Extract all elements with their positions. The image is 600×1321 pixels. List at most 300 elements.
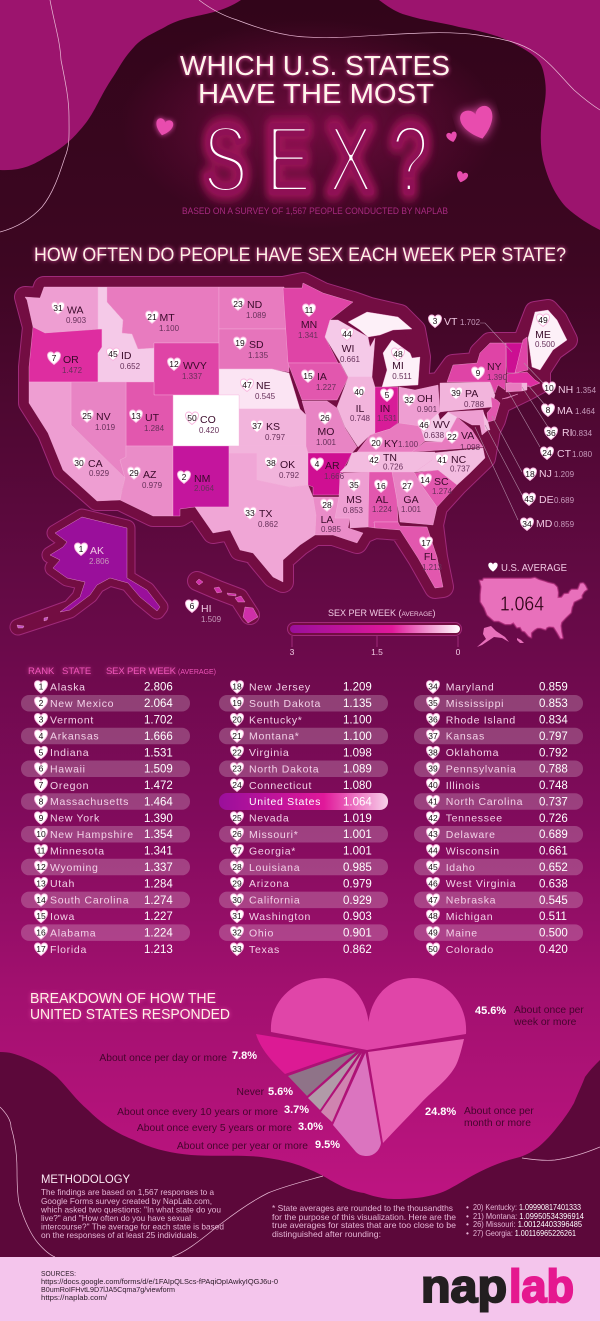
- label: HI: 1.509: [201, 615, 222, 624]
- US silhouette glow: [480, 578, 587, 638]
- label: IN: [377, 389, 398, 423]
- label: 3.7%: [117, 1104, 309, 1118]
- label: MO: 1.001: [316, 438, 337, 447]
- state: Arizona: [120, 446, 173, 516]
- legend title: SEX PER WEEK (AVERAGE): [328, 608, 435, 618]
- label: GA: 27: [402, 481, 412, 491]
- label: CA: [72, 457, 110, 478]
- row: Florida: 17: [36, 944, 46, 954]
- label: 7.8%: [99, 1050, 257, 1064]
- footnote: distinguished after rounding:: [272, 1229, 381, 1239]
- state: Hawaii Oahu: [214, 587, 222, 593]
- title: [180, 50, 450, 109]
- label: LA: LA: [321, 514, 333, 526]
- row: Nebraska: [414, 892, 583, 908]
- label: IN: IN: [380, 403, 390, 415]
- logo: naplab: [421, 1260, 574, 1312]
- row: Maryland: 34: [428, 682, 438, 692]
- row: Nevada: [230, 812, 372, 825]
- label: VA: VA: [461, 430, 474, 442]
- slice: every 5 years 3.0%: [321, 1053, 362, 1122]
- label: WA: WA: [67, 304, 84, 316]
- table column 2: [219, 681, 388, 956]
- label: MN: MN: [301, 319, 317, 331]
- row: Texas: Texas: [249, 944, 280, 956]
- state: Long Island: [502, 394, 518, 399]
- label: OK: 38: [266, 458, 276, 468]
- label: KY: [369, 437, 419, 450]
- label: RI: RI: [562, 427, 572, 439]
- row: Ohio: Ohio: [249, 927, 274, 939]
- row: Alabama: 16: [36, 928, 46, 938]
- row: Wyoming: Wyoming: [50, 862, 99, 874]
- state: Maryland: [448, 410, 488, 435]
- icon: heart large right: [458, 104, 498, 143]
- state: Ohio: [399, 385, 440, 426]
- row: South Dakota: 19: [232, 698, 242, 708]
- row: Massachusetts: 1.464: [144, 796, 173, 808]
- row: New Jersey: [230, 681, 372, 694]
- state: Minnesota: [283, 283, 353, 363]
- title word: SEX? neon: SEX?: [203, 105, 429, 213]
- row: California: [219, 892, 388, 908]
- legend labels: 3: [290, 647, 295, 657]
- footnote list: 27) Georgia: 1.00116965226261: [473, 1228, 576, 1238]
- row: Massachusetts: Massachusetts: [50, 796, 129, 808]
- row: Connecticut: [230, 779, 372, 792]
- label: FL: [419, 537, 443, 572]
- label: OH: 32: [404, 395, 414, 405]
- row: Maryland: Maryland: [446, 682, 494, 694]
- row: Nebraska: Nebraska: [446, 895, 496, 907]
- row: Florida: [34, 943, 173, 956]
- decorative line: bottom right: [522, 1147, 600, 1160]
- methodology text: intercourse?" The average for each state is based: [41, 1222, 224, 1232]
- title: HAVE THE MOST: [198, 78, 434, 109]
- state: Rhode Island: [522, 383, 527, 391]
- row: New York: 1.390: [144, 813, 173, 825]
- row: Wisconsin: Wisconsin: [446, 845, 500, 857]
- state: Montana: [107, 287, 219, 349]
- row: New Hampshire: New Hampshire: [50, 829, 134, 841]
- label: 24.8%: About once per: [464, 1106, 534, 1117]
- label: CO: 50: [187, 413, 197, 423]
- label: 9.5%: About once per year or more: [177, 1141, 308, 1152]
- row: Virginia: 1.098: [343, 747, 372, 759]
- label: ND: 1.089: [246, 311, 267, 320]
- row: Nebraska: 47: [428, 895, 438, 905]
- label: MT: [145, 311, 180, 333]
- label: CA: 30: [74, 458, 84, 468]
- label: IN: 5: [385, 390, 390, 400]
- label: NE: [240, 379, 276, 401]
- row: Vermont: Vermont: [50, 714, 94, 726]
- state: Michigan lower: [382, 340, 420, 387]
- row: New Jersey: 1.209: [343, 682, 372, 694]
- row: South Dakota: South Dakota: [249, 698, 321, 710]
- map: band around Hawaii: [197, 581, 250, 615]
- legend labels: 1.5: [371, 647, 383, 657]
- label: WI: [340, 328, 361, 364]
- state: Wyoming: [154, 343, 219, 395]
- label: AZ: [127, 467, 163, 490]
- footnote: [272, 1203, 456, 1239]
- logo: naplab: nap: [421, 1260, 507, 1312]
- label: ND: [231, 298, 267, 320]
- heading: U.S. average: U.S. AVERAGE: [501, 562, 567, 574]
- row: Missouri: 1.001: [343, 829, 372, 841]
- state: South Dakota: [219, 329, 289, 372]
- row: Mississippi: Mississippi: [446, 698, 504, 710]
- row: Virginia: Virginia: [249, 747, 289, 759]
- label: 9.5%: 9.5%: [315, 1139, 340, 1151]
- state: Texas: [195, 453, 316, 582]
- row: Idaho: 45: [428, 862, 438, 872]
- row: Alaska: [34, 681, 173, 694]
- row: North Dakota: [219, 760, 388, 777]
- icon: heart left: [154, 117, 174, 137]
- state: South Carolina: [414, 470, 457, 507]
- label: CA: CA: [88, 458, 103, 470]
- state: New Mexico: [173, 446, 229, 516]
- row: Wisconsin: 0.661: [539, 846, 568, 858]
- slice: never 5.6%: [288, 1052, 356, 1096]
- breakdown heading: BREAKDOWN OF HOW THE: [30, 991, 216, 1007]
- footer panel: [0, 1257, 600, 1321]
- label: 3.0%: About once every 5 years or more: [137, 1123, 292, 1134]
- label: NV: [80, 410, 116, 432]
- label: 9.5%: [177, 1139, 340, 1152]
- label: AL: AL: [376, 494, 389, 506]
- row: Maine: Maine: [446, 927, 478, 939]
- table header: SEX PER WEEK: [106, 666, 177, 677]
- label: OH: OH: [417, 393, 433, 405]
- row: Kansas: [414, 728, 583, 744]
- row: Florida: Florida: [50, 944, 87, 956]
- label: IA: [301, 370, 337, 392]
- state: Hawaii Maui: [235, 596, 245, 602]
- label: WV: 46: [419, 420, 429, 430]
- label: WV: WV: [433, 419, 450, 431]
- label: KY: 20: [371, 438, 381, 448]
- label: WI: 44: [342, 329, 352, 339]
- label: CO: 0.420: [199, 426, 220, 435]
- state: New York: [447, 343, 506, 393]
- label: SC: 1.274: [432, 487, 453, 496]
- row: Louisiana: 28: [232, 862, 242, 872]
- label: WI: WI: [342, 343, 354, 355]
- row: United States: United States: [249, 796, 321, 808]
- row: Indiana: 1.531: [144, 747, 173, 759]
- row: Montana: 1.100: [343, 731, 372, 743]
- US silhouette: [480, 578, 587, 638]
- row: Illinois: 40: [428, 780, 438, 790]
- label: MO: [316, 412, 337, 447]
- row: Delaware: Delaware: [446, 829, 496, 841]
- label: AK: [74, 543, 110, 566]
- legend labels: [290, 647, 461, 657]
- row: Arkansas: Arkansas: [50, 731, 99, 743]
- row: Mississippi: 0.853: [539, 698, 568, 710]
- row: North Carolina: [414, 793, 583, 810]
- state: Alabama: [368, 472, 398, 528]
- row: Oregon: 7: [39, 780, 44, 790]
- label: CO: [185, 412, 220, 435]
- row: New Hampshire: 1.354: [144, 829, 173, 841]
- methodology text: live?" and "How often do you have sexual: [41, 1213, 191, 1223]
- label: 5.6%: Never: [237, 1087, 265, 1098]
- state: Hawaii Molokai: [227, 593, 236, 596]
- row: New Jersey: 18: [232, 682, 242, 692]
- row: Tennessee: 42: [428, 813, 438, 823]
- label: PA: PA: [465, 388, 478, 400]
- label: ID: ID: [121, 350, 132, 362]
- row: Louisiana: Louisiana: [249, 862, 300, 874]
- decorative line: bottom middle: [172, 1176, 323, 1257]
- row: Maine: 49: [428, 928, 438, 938]
- blob: bottom dark: [0, 1052, 600, 1260]
- row: South Dakota: [219, 695, 388, 712]
- label: VA: 22: [447, 432, 457, 442]
- label: MI: 48: [393, 349, 403, 359]
- state: Missouri: [302, 401, 357, 453]
- row: Ohio: 0.901: [343, 928, 372, 940]
- sources: https://docs.google.com/forms/d/e/1FAIpQLScs-fPAqiOpIAwkyIQGJ6u-0: [41, 1277, 278, 1286]
- row: Minnesota: Minnesota: [50, 845, 105, 857]
- row: Arkansas: 1.666: [144, 731, 173, 743]
- legend bar: [288, 622, 462, 636]
- label: NY: 9: [476, 368, 481, 378]
- icon: heart small right: [446, 131, 458, 143]
- label: TX: 33: [245, 508, 255, 518]
- footnote list: •: [466, 1219, 469, 1229]
- state: Virginia: [412, 417, 483, 452]
- label: MA: MA: [557, 405, 573, 417]
- row: Florida: 1.213: [144, 944, 173, 956]
- label: MA: 8: [546, 405, 551, 415]
- row: Rhode Island: 36: [428, 714, 438, 724]
- map: band around Alaska: [18, 517, 160, 627]
- row: Louisiana: 0.985: [343, 862, 372, 874]
- label: 3.0%: 3.0%: [298, 1121, 323, 1133]
- label: MO: 26: [320, 413, 330, 423]
- row: Wisconsin: 44: [428, 846, 438, 856]
- row: Connecticut: 24: [232, 780, 242, 790]
- row: West Virginia: 46: [428, 878, 438, 888]
- row: Vermont: 3: [39, 714, 44, 724]
- row: Michigan: 0.511: [539, 911, 567, 923]
- state: Vermont: [506, 343, 523, 373]
- map labels: [47, 298, 597, 624]
- row: North Carolina: 0.737: [539, 796, 568, 808]
- row: Oregon: Oregon: [50, 780, 89, 792]
- row: Tennessee: Tennessee: [446, 813, 503, 825]
- row: Rhode Island: [426, 714, 568, 726]
- Hawaii mini: [517, 638, 524, 643]
- breakdown heading: BREAKDOWN OF HOW THE: [30, 991, 216, 1007]
- state: Colorado: [173, 395, 239, 446]
- row: North Dakota: North Dakota: [249, 764, 319, 776]
- row: Delaware: 43: [428, 829, 438, 839]
- row: North Dakota: 23: [232, 764, 242, 774]
- label: LA: 0.985: [321, 525, 342, 534]
- label: DE: DE: [539, 494, 554, 506]
- label: WV: [417, 419, 450, 440]
- label: CT: 1.080: [572, 450, 593, 459]
- label: AK: 1: [79, 544, 84, 554]
- state: New Hampshire: [515, 337, 528, 373]
- label: IL: [350, 386, 371, 423]
- blob: top left: [0, 0, 241, 170]
- sources: B0umRoIFHvtL9D7lJA5Cqma7g/viewform: [41, 1285, 175, 1294]
- label: 45.6%: week or more: [513, 1017, 577, 1028]
- row: Oregon: [34, 779, 173, 792]
- breakdown heading: [30, 991, 230, 1023]
- label: KY: KY: [384, 438, 398, 450]
- row: Alaska: 2.806: [144, 682, 173, 694]
- row: West Virginia: West Virginia: [446, 878, 516, 890]
- row: Colorado: 50: [428, 944, 438, 954]
- row: Montana: Montana*: [249, 731, 300, 743]
- slice: every 10 years 3.7%: [308, 1053, 359, 1110]
- footnote list: •: [466, 1202, 469, 1212]
- label: IA: 15: [303, 371, 313, 381]
- row: Connecticut: 1.080: [343, 780, 372, 792]
- label: HI: [185, 600, 222, 624]
- label: MT: 21: [147, 312, 157, 322]
- row: Delaware: [414, 826, 583, 842]
- methodology: [40, 1174, 224, 1240]
- row: Oklahoma: Oklahoma: [446, 747, 499, 759]
- row: Utah: Utah: [50, 878, 75, 890]
- label: PA: 0.788: [464, 400, 485, 409]
- label: 45.6%: About once per: [514, 1005, 584, 1016]
- row: Alabama: [21, 924, 190, 941]
- title: WHICH U.S. STATES: [180, 50, 450, 81]
- row: Maryland: 0.859: [539, 682, 568, 694]
- row: New Mexico: New Mexico: [50, 698, 114, 710]
- state: Nevada: [71, 382, 126, 478]
- methodology text: [40, 1187, 224, 1240]
- row: Kentucky: Kentucky*: [249, 714, 303, 726]
- label: CA: 0.929: [89, 469, 110, 478]
- label: WY: WVY: [183, 360, 207, 372]
- row: Kansas: 0.797: [539, 731, 568, 743]
- row: Ohio: 32: [232, 928, 242, 938]
- legend: [288, 608, 462, 657]
- row: South Carolina: South Carolina: [50, 895, 129, 907]
- label: VA: 1.098: [460, 443, 481, 452]
- state: Hawaii big island: [243, 607, 258, 623]
- row: Iowa: 1.227: [144, 911, 173, 923]
- row: Wisconsin: [426, 845, 568, 858]
- row: Washington: Washington: [249, 911, 311, 923]
- state: West Virginia: [421, 412, 457, 442]
- row: Utah: 1.284: [144, 878, 173, 890]
- label: KS: 37: [252, 421, 262, 431]
- label: IL: IL: [356, 403, 365, 415]
- row: Texas: 0.862: [343, 944, 372, 956]
- state: Idaho: [98, 287, 154, 382]
- row: Utah: 13: [36, 878, 46, 888]
- label: 3.7%: About once every 10 years or more: [117, 1107, 278, 1118]
- label: WY: 1.337: [182, 372, 203, 381]
- label: 24.8%: month or more: [464, 1118, 531, 1129]
- label: WY: [167, 358, 207, 381]
- row: Arkansas: [21, 728, 190, 744]
- row: West Virginia: 0.638: [539, 878, 568, 890]
- label: TX: TX: [259, 508, 272, 520]
- label: CO: CO: [200, 414, 216, 426]
- label: OH: 0.901: [417, 405, 438, 414]
- row: Missouri: 26: [232, 829, 242, 839]
- state: Utah: [126, 382, 173, 446]
- footnote: * State averages are rounded to the thousandths: [272, 1203, 453, 1213]
- row: Washington: 0.903: [343, 911, 372, 923]
- label: VT: 3: [433, 316, 438, 326]
- row: Minnesota: 1.341: [144, 846, 173, 858]
- label: UT: 1.284: [144, 424, 165, 433]
- state: Kansas: [239, 409, 306, 446]
- label: AZ: 0.979: [142, 481, 163, 490]
- row: United States: 1.064: [343, 796, 372, 808]
- row: New York: [34, 812, 173, 825]
- row: Michigan: 48: [428, 911, 438, 921]
- row: West Virginia: [426, 877, 568, 890]
- state: Washington: [25, 287, 98, 333]
- sources: https://naplab.com/: [41, 1293, 108, 1302]
- Alaska mini: [477, 626, 509, 647]
- methodology text: on the responses of at least 25 individuals.: [41, 1230, 199, 1240]
- row: Illinois: Illinois: [446, 780, 480, 792]
- table column 1: [21, 681, 190, 956]
- label: MI: [391, 348, 412, 381]
- label: MD: 0.859: [554, 520, 575, 529]
- label: WY: 12: [169, 359, 179, 369]
- state: Florida: [374, 522, 443, 588]
- row: New Mexico: 2.064: [144, 698, 173, 710]
- row: Louisiana: [219, 859, 388, 875]
- methodology heading: METHODOLOGY: [41, 1174, 130, 1186]
- label: NJ: 1.209: [554, 470, 575, 479]
- label: AZ: 29: [129, 468, 139, 478]
- label: MD: [520, 518, 575, 530]
- row: Hawaii: [21, 760, 190, 777]
- title word: SEX? neon: SEX?: [203, 105, 429, 213]
- label: NE: NE: [256, 380, 271, 392]
- leader lines for northeast states: [475, 323, 550, 520]
- row: Arkansas: 4: [39, 731, 44, 741]
- row: New Mexico: 2: [39, 698, 44, 708]
- label: 24.8%: [425, 1106, 534, 1129]
- decorative line: top: [199, 0, 600, 110]
- row: Iowa: [34, 910, 173, 923]
- label: AL: [372, 480, 393, 514]
- label: 3.7%: 3.7%: [284, 1104, 309, 1116]
- row: Idaho: 0.652: [539, 862, 568, 874]
- label: AR: AR: [325, 460, 340, 472]
- state: Oregon: [29, 327, 102, 382]
- row: Illinois: 0.748: [539, 780, 568, 792]
- row: Idaho: [414, 859, 583, 875]
- label: SD: [233, 337, 269, 360]
- label: NM: 2: [182, 472, 187, 482]
- legend ticks: [292, 636, 458, 647]
- row: Massachusetts: 8: [39, 796, 44, 806]
- slice: about once per year 9.5%: [333, 1053, 381, 1156]
- row: Alabama: 1.224: [144, 928, 173, 940]
- breakdown heading: UNITED STATES RESPONDED: [30, 1007, 230, 1023]
